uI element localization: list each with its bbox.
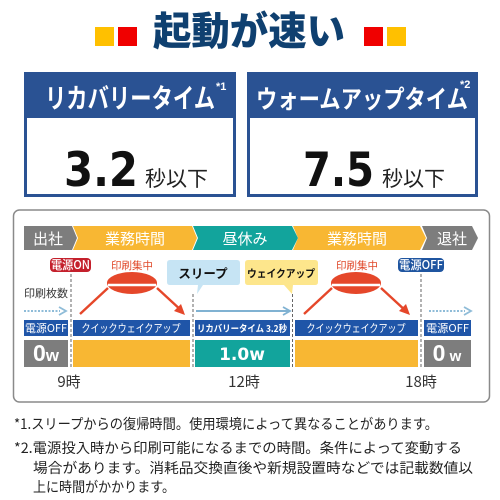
timeline header: leaving: 退社 [437,228,467,249]
time axis labels [57,371,437,392]
timeline header: work hours afternoon: 業務時間 [327,228,387,249]
arrow: sleep level [196,307,290,315]
power bar: 0W evening [424,340,471,367]
badge: power off: 電源OFF [399,256,443,273]
mode bar: quick wake up afternoon: クイックウェイクアップ [306,320,406,336]
power bar: morning work [73,340,190,367]
power bar: 0W evening: 0 w [433,340,462,366]
callout: wake up [245,260,318,294]
callout: wake up: ウェイクアップ [247,266,315,281]
panel: recovery time [24,72,236,198]
time axis labels: 12時 [228,371,260,392]
timeline header: leaving [422,226,478,250]
callout: sleep [167,260,240,294]
panel: daily timeline diagram [14,210,490,402]
power bar: afternoon work [295,340,418,367]
chart: afternoon print peak [304,258,410,315]
power bar: 0W morning: 0w [33,340,60,366]
power bar: 1.0W: 1.0w [219,345,265,365]
panel: recovery time: *1 [216,81,226,93]
panel: warm-up time: ウォームアップタイム [256,80,468,116]
panel: recovery time: 秒以下 [145,163,208,193]
timeline header: lunch break [193,226,298,250]
timeline header: arrival [24,226,77,250]
footnotes: *2.電源投入時から印刷可能になるまでの時間。条件によって変動する [14,438,462,458]
power bar: 0W morning [24,340,68,367]
time axis labels: 9時 [57,371,81,392]
panel: warm-up time: 秒以下 [382,163,445,193]
panel: warm-up time: 7.5 [303,143,374,198]
arrow: after work [429,307,471,315]
timeline header: work hours morning: 業務時間 [105,228,165,249]
panel: warm-up time [247,72,478,198]
timeline header: work hours afternoon [293,226,426,250]
footnotes: 上に時間がかかります。 [33,477,175,497]
mode bar: power off morning: 電源OFF [25,320,67,336]
chart: afternoon print peak: 印刷集中 [336,258,378,273]
panel: recovery time: 3.2 [64,143,138,198]
timeline header: arrival: 出社 [33,228,63,249]
badge: power on: 電源ON [51,256,90,273]
chart: morning print peak [80,258,185,315]
footnotes: *1.スリープからの復帰時間。使用環境によって異なることがあります。 [14,414,438,434]
callout: sleep: スリープ [178,263,228,282]
mode bar: recovery time: リカバリータイム 3.2秒 [197,321,287,335]
power bar: 1.0W [195,340,290,367]
time axis labels: 18時 [405,371,437,392]
label: print count: 印刷枚数 [24,285,68,301]
chart: morning print peak: 印刷集中 [111,258,153,273]
mode bar: quick wake up morning: クイックウェイクアップ [82,320,180,336]
panel: warm-up time: *2 [460,79,470,91]
heading: title with squares [95,1,406,57]
footnotes [14,414,473,497]
mode bar: power off evening: 電源OFF [426,320,469,336]
timeline header: work hours morning [73,226,197,250]
arrow: before work [24,307,66,315]
panel: recovery time: リカバリータイム [45,77,215,116]
heading: title with squares: 起動が速い [153,1,345,57]
dashed time markers [71,274,421,368]
footnotes: 場合があります。消耗品交換直後や新規設置時などでは記載数値以 [33,458,473,478]
timeline header: lunch break: 昼休み [222,228,268,249]
